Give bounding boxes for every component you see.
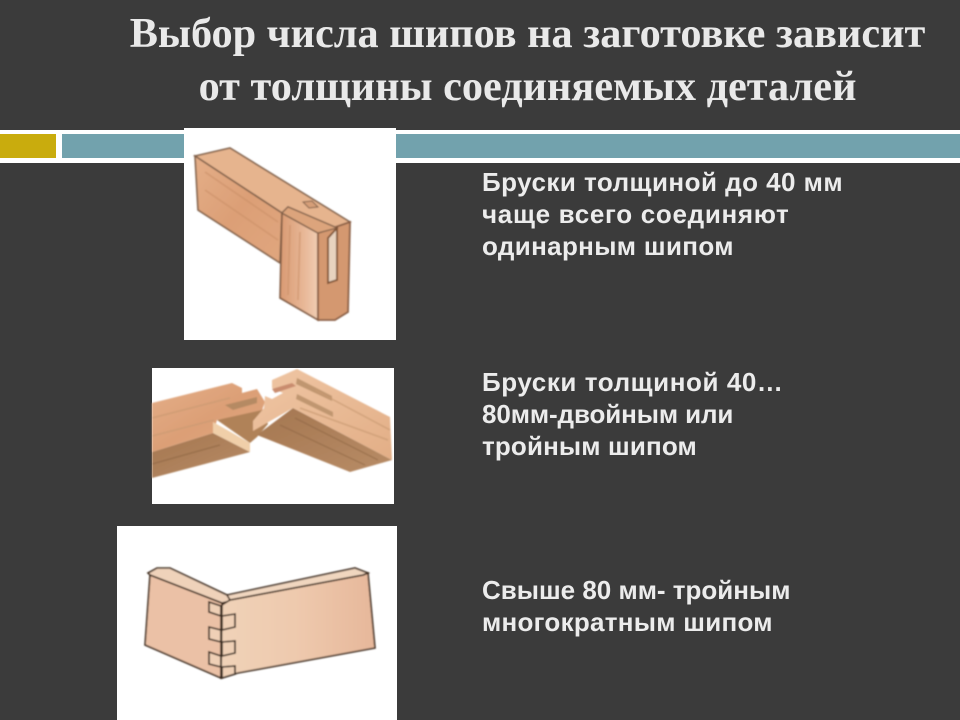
image: multiple tenon joint — [117, 526, 397, 720]
yellow accent block — [0, 134, 56, 158]
left beam dark face — [152, 433, 250, 478]
text: double or triple tenon: Бруски толщиной 40… — [482, 367, 784, 397]
wood grain — [205, 172, 300, 300]
left slot — [225, 397, 257, 410]
image: double tenon joint — [152, 368, 394, 504]
right beam dark face — [257, 408, 392, 472]
text: single tenon: чаще всего соединяют — [482, 199, 789, 229]
text: double or triple tenon — [482, 367, 784, 461]
header bar — [0, 130, 960, 163]
post front face — [280, 213, 318, 320]
beam top face — [195, 148, 350, 228]
wood grain — [152, 390, 390, 440]
post right face — [318, 222, 350, 320]
left beam light face — [152, 383, 265, 452]
left gap shadow — [217, 408, 268, 443]
left lower tenon — [213, 422, 250, 452]
text: multiple tenon: многократным шипом — [482, 607, 773, 637]
title: от толщины соединяемых деталей — [199, 63, 856, 110]
right slots — [296, 378, 332, 401]
image: single tenon joint — [184, 128, 396, 340]
text: multiple tenon: Свыше 80 мм- тройным — [482, 575, 790, 605]
text: single tenon: Бруски толщиной до 40 мм — [482, 167, 843, 197]
finger joints — [209, 602, 235, 678]
left board — [145, 575, 222, 678]
text: double or triple tenon: 80мм-двойным или — [482, 399, 733, 429]
beam side face — [195, 156, 282, 263]
tenon notch — [303, 201, 318, 208]
title: Выбор числа шипов на заготовке зависит — [130, 10, 925, 57]
text: double or triple tenon: тройным шипом — [482, 431, 697, 461]
text: single tenon: одинарным шипом — [482, 231, 734, 261]
right board — [221, 573, 375, 678]
text: single tenon — [482, 167, 843, 261]
left board top edge — [148, 568, 235, 603]
right beam light face — [253, 369, 392, 460]
right board top edge — [227, 568, 368, 600]
text: multiple tenon — [482, 575, 790, 637]
slot — [328, 228, 337, 283]
post top face — [282, 207, 337, 233]
title — [130, 10, 925, 110]
teal band — [62, 134, 960, 158]
